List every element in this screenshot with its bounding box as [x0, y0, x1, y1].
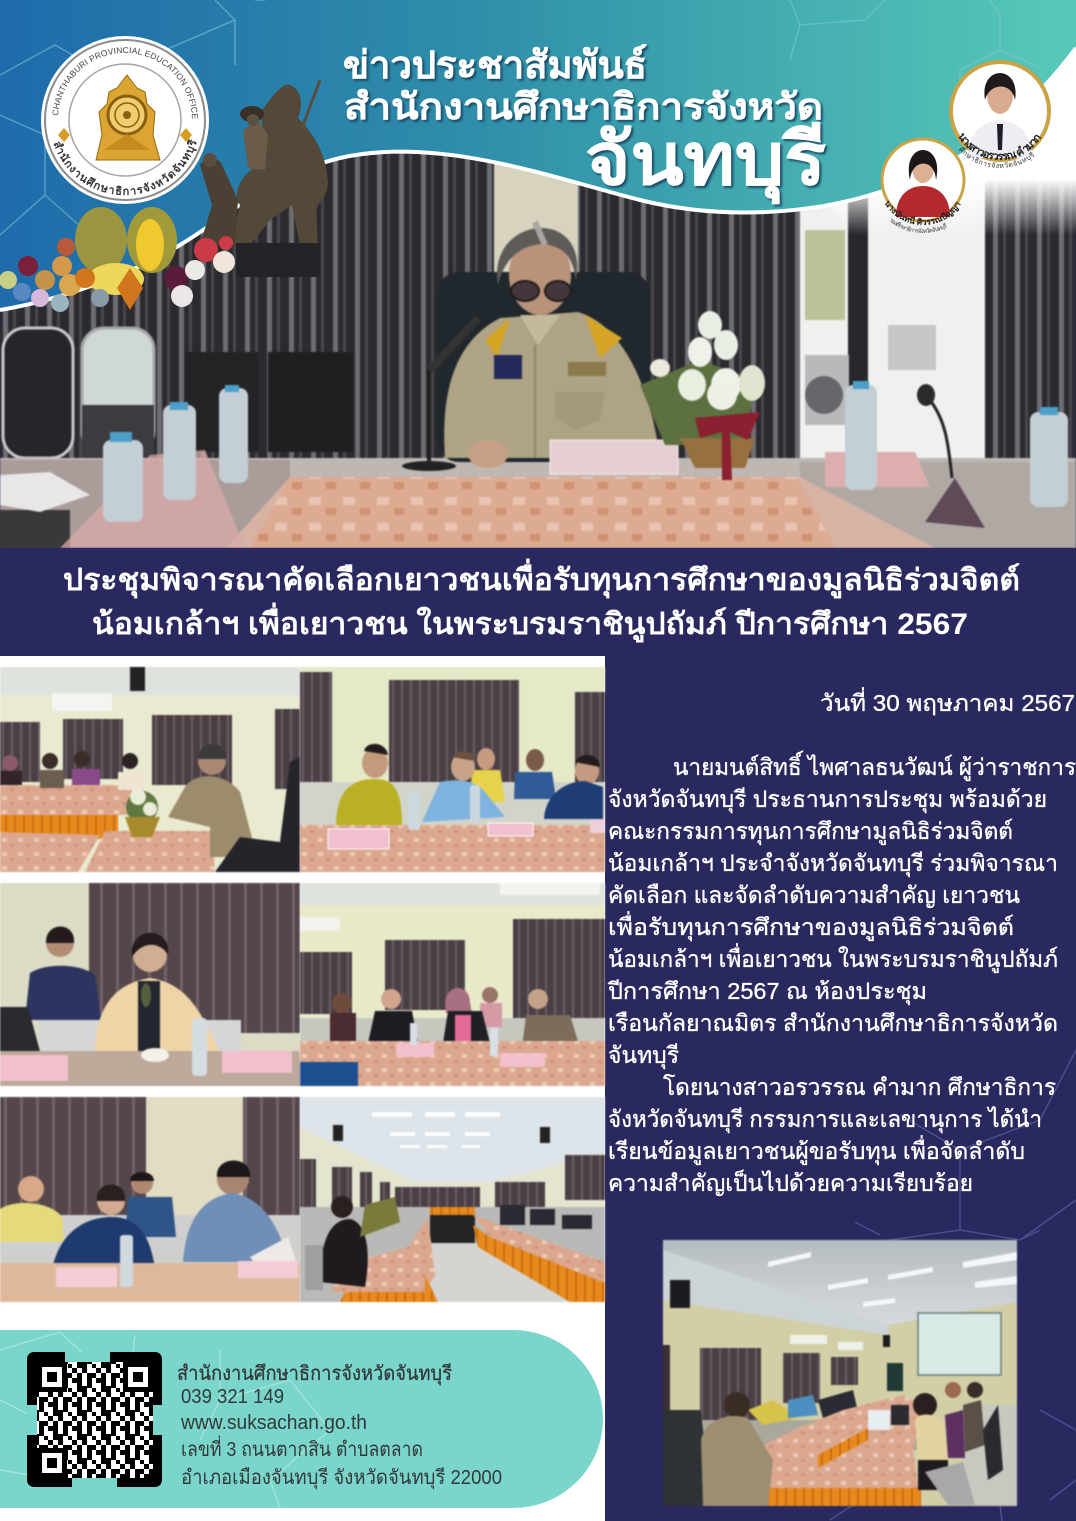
text block: date and news story: คัดเลือก และจัดลำดับความสำคัญ เยาวชน: [608, 882, 1020, 908]
contact text: 039 321 149: [181, 1386, 284, 1408]
flower arrangement: [640, 311, 765, 480]
text block: date and news story: นายมนต์สิทธิ์ ไพศาลธนวัฒน์ ผู้ว่าราชการ: [673, 750, 1076, 781]
photo 3: woman speaking into microphone: [0, 882, 300, 1087]
panel: photo gallery background: [0, 656, 605, 1521]
text block: date and news story: น้อมเกล้าฯ เพื่อเยาวชน ในพระบรมราชินูปถัมภ์: [608, 943, 1058, 973]
microphone: [402, 318, 478, 471]
portrait: second officer: รองศึกษาธิการจังหวัดจันทบุรี: [890, 218, 947, 233]
text block: date and news story: วันที่ 30 พฤษภาคม 2567: [820, 687, 1075, 716]
name plate: [550, 440, 678, 474]
photo 6: wide view of meeting hall: [299, 1096, 606, 1303]
contact text: อำเภอเมืองจันทบุรี จังหวัดจันทบุรี 22000: [181, 1467, 502, 1490]
fruits and gems: [0, 207, 235, 312]
man in khaki uniform: [444, 222, 660, 468]
portrait: second officer: [880, 138, 966, 233]
photo 7: meeting room with projector screen: [662, 1239, 1018, 1507]
contact text: สำนักงานศึกษาธิการจังหวัดจันทบุรี: [177, 1363, 452, 1386]
heading: news and office name: จันทบุรี: [585, 120, 826, 205]
statue of King Taksin: [200, 80, 328, 277]
title band: น้อมเกล้าฯ เพื่อเยาวชน ในพระบรมราชินูปถัมภ์ ปีการศึกษา 2567: [92, 602, 968, 643]
text block: date and news story: จังหวัดจันทบุรี กรรมการและเลขานุการ ได้นำ: [608, 1106, 1042, 1133]
text block: date and news story: คณะกรรมการทุนการศึกษามูลนิธิร่วมจิตต์: [608, 818, 1013, 845]
text block: date and news story: จังหวัดจันทบุรี ประธานการประชุม พร้อมด้วย: [608, 786, 1047, 813]
header banner with wave: [0, 0, 1076, 310]
portrait: second officer: นางนันทนี ศิวรรณปัญญา: [884, 200, 961, 226]
portrait: Provincial Education Officer: ศึกษาธิการจังหวัดจันทบุรี: [958, 147, 1034, 168]
contact text: เลขที่ 3 ถนนตากสิน ตำบลตลาด: [181, 1435, 423, 1461]
text block: date and news story: โดยนางสาวอรวรรณ คำมาก ศึกษาธิการ: [663, 1074, 1056, 1100]
photo 4: committee along the table: [299, 882, 606, 1087]
text block: date and news story: ปีการศึกษา 2567 ณ ห้องประชุม: [607, 978, 927, 1005]
text block: date and news story: [607, 687, 1076, 1196]
contact text: [177, 1363, 502, 1490]
text block: date and news story: เรียนข้อมูลเยาวชนผู้ขอรับทุน เพื่อจัดลำดับ: [608, 1135, 1025, 1165]
icon: education office logo: CHANTHABURI PROVINCIAL EDUCATION OFFICE: [52, 47, 198, 119]
text block: date and news story: น้อมเกล้าฯ ประจำจังหวัดจันทบุรี ร่วมพิจารณา: [608, 850, 1058, 877]
hero photo: governor chairing the meeting: [0, 154, 1076, 548]
photo 2: committee women writing: [299, 666, 606, 873]
panel: contact footer: [0, 1330, 603, 1508]
text block: date and news story: ความสำคัญเป็นไปด้วยความเรียบร้อย: [608, 1168, 973, 1196]
portrait: Provincial Education Officer: [949, 60, 1051, 168]
photo 5: committee members reviewing papers: [0, 1096, 300, 1303]
text block: date and news story: เพื่อรับทุนการศึกษาของมูลนิธิร่วมจิตต์: [608, 911, 1014, 941]
portrait: Provincial Education Officer: นางสาวอรวรรณ คำมาก: [958, 133, 1042, 160]
heading: news and office name: สำนักงานศึกษาธิการจังหวัด: [344, 86, 823, 127]
icon: education office logo: สำนักงานศึกษาธิการจังหวัดจันทบุรี: [54, 139, 198, 196]
text block: date and news story: จันทบุรี: [608, 1042, 679, 1069]
honeycomb lines on navy panel: [830, 1050, 1076, 1521]
title band: ประชุมพิจารณาคัดเลือกเยาวชนเพื่อรับทุนการศึกษาของมูลนิธิร่วมจิตต์: [63, 558, 1020, 599]
photo 1: governor at table: [0, 666, 301, 873]
water bottles: [103, 385, 1068, 522]
title band: [0, 548, 1076, 656]
text block: date and news story: เรือนกัลยาณมิตร สำนักงานศึกษาธิการจังหวัด: [608, 1010, 1058, 1036]
icon: education office logo: [41, 36, 209, 204]
heading: news and office name: [343, 44, 826, 205]
heading: news and office name: ข่าวประชาสัมพันธ์: [343, 44, 647, 87]
QR code: [27, 1352, 162, 1489]
contact text: www.suksachan.go.th: [180, 1412, 367, 1434]
